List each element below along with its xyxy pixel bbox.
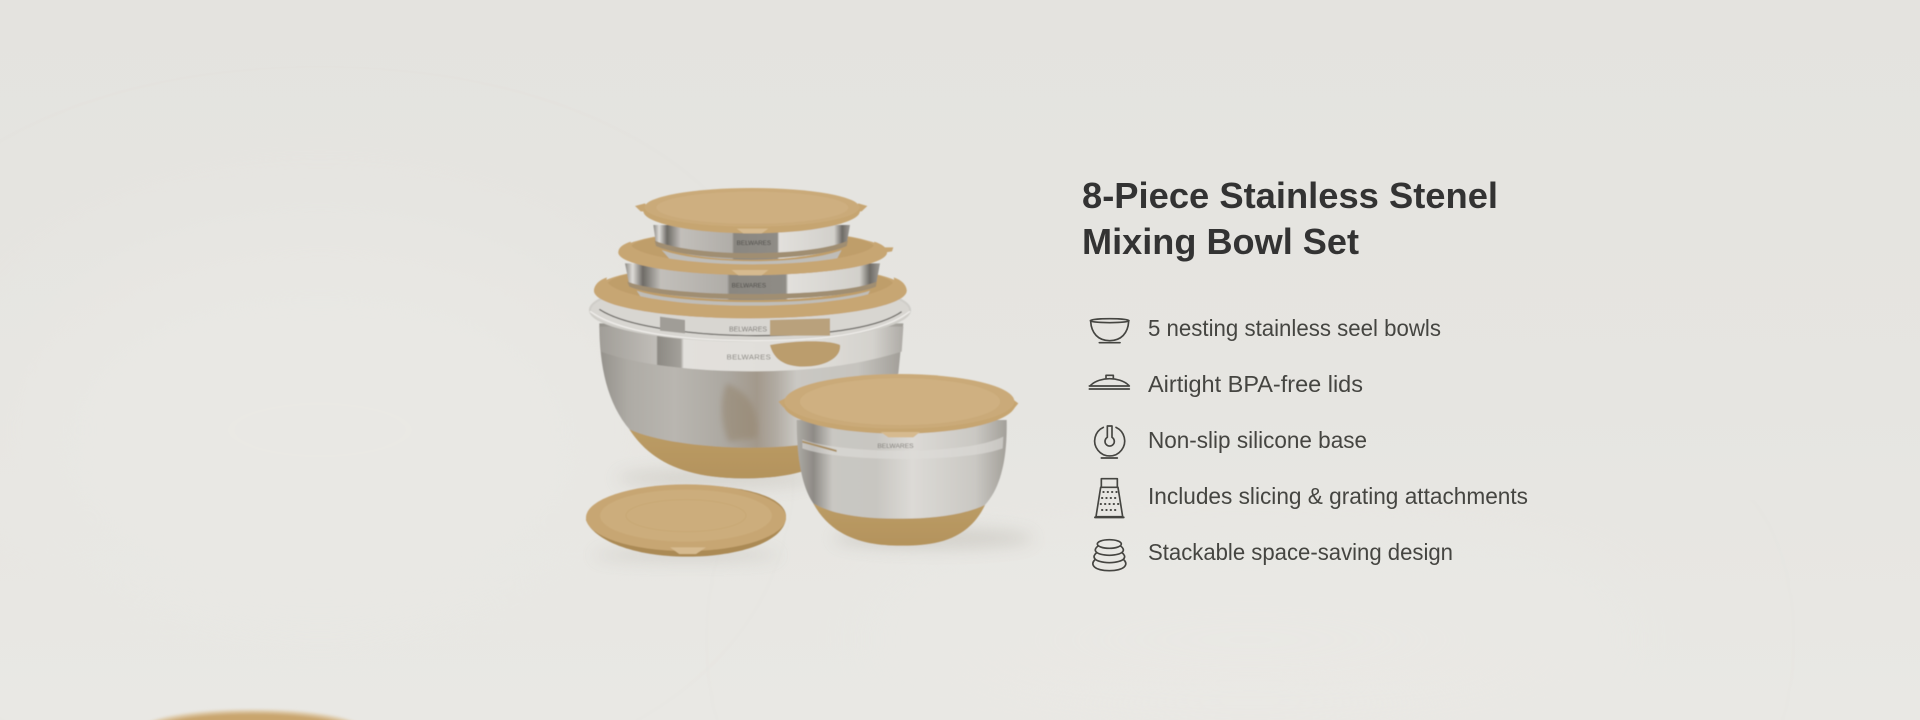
icon: stacked bowls <box>1093 540 1126 571</box>
title: Mixing Bowl Set <box>1082 221 1359 262</box>
feature: stackable: Stackable space-saving design <box>1148 539 1453 565</box>
loose lid <box>586 484 786 557</box>
small bowl lid <box>778 374 1018 437</box>
second lid front rim <box>618 242 887 275</box>
third lid back <box>594 263 907 318</box>
third lid front rim <box>594 277 907 318</box>
second bowl: BELWARES <box>732 282 766 289</box>
icon: bowl <box>1090 319 1129 343</box>
feature: nesting bowls: 5 nesting stainless seel bowls <box>1148 315 1441 341</box>
BELWARES mark: BELWARES <box>877 443 914 450</box>
first bowl <box>653 225 850 265</box>
BELWARES mark: BELWARES <box>727 353 771 362</box>
feature list <box>1089 315 1528 571</box>
icon: lid <box>1089 375 1129 389</box>
shadow under bowls <box>593 468 1033 560</box>
feature: silicone base: Non-slip silicone base <box>1148 427 1367 453</box>
second lid back <box>618 230 893 275</box>
top lid <box>635 188 867 233</box>
second bowl <box>625 263 880 311</box>
feature: attachments: Includes slicing & grating attachments <box>1148 483 1528 509</box>
feature: attachments <box>1095 479 1528 517</box>
large bowl rim <box>590 279 910 341</box>
title: 8-Piece Stainless Stenel <box>1082 175 1498 216</box>
title <box>1082 175 1498 262</box>
partial lid at bottom edge <box>142 710 362 720</box>
feature: lids: Airtight BPA-free lids <box>1148 371 1363 397</box>
large bowl with silicone base <box>599 323 903 478</box>
first bowl: BELWARES <box>737 240 771 247</box>
feature: stackable <box>1093 539 1453 571</box>
feature: silicone base <box>1095 426 1367 458</box>
small bowl <box>778 374 1018 546</box>
product photo: mixing bowl set <box>586 188 1033 560</box>
icon: non-slip base <box>1095 426 1125 458</box>
large bowl rim: BELWARES <box>729 326 767 333</box>
icon: grater <box>1095 479 1124 517</box>
